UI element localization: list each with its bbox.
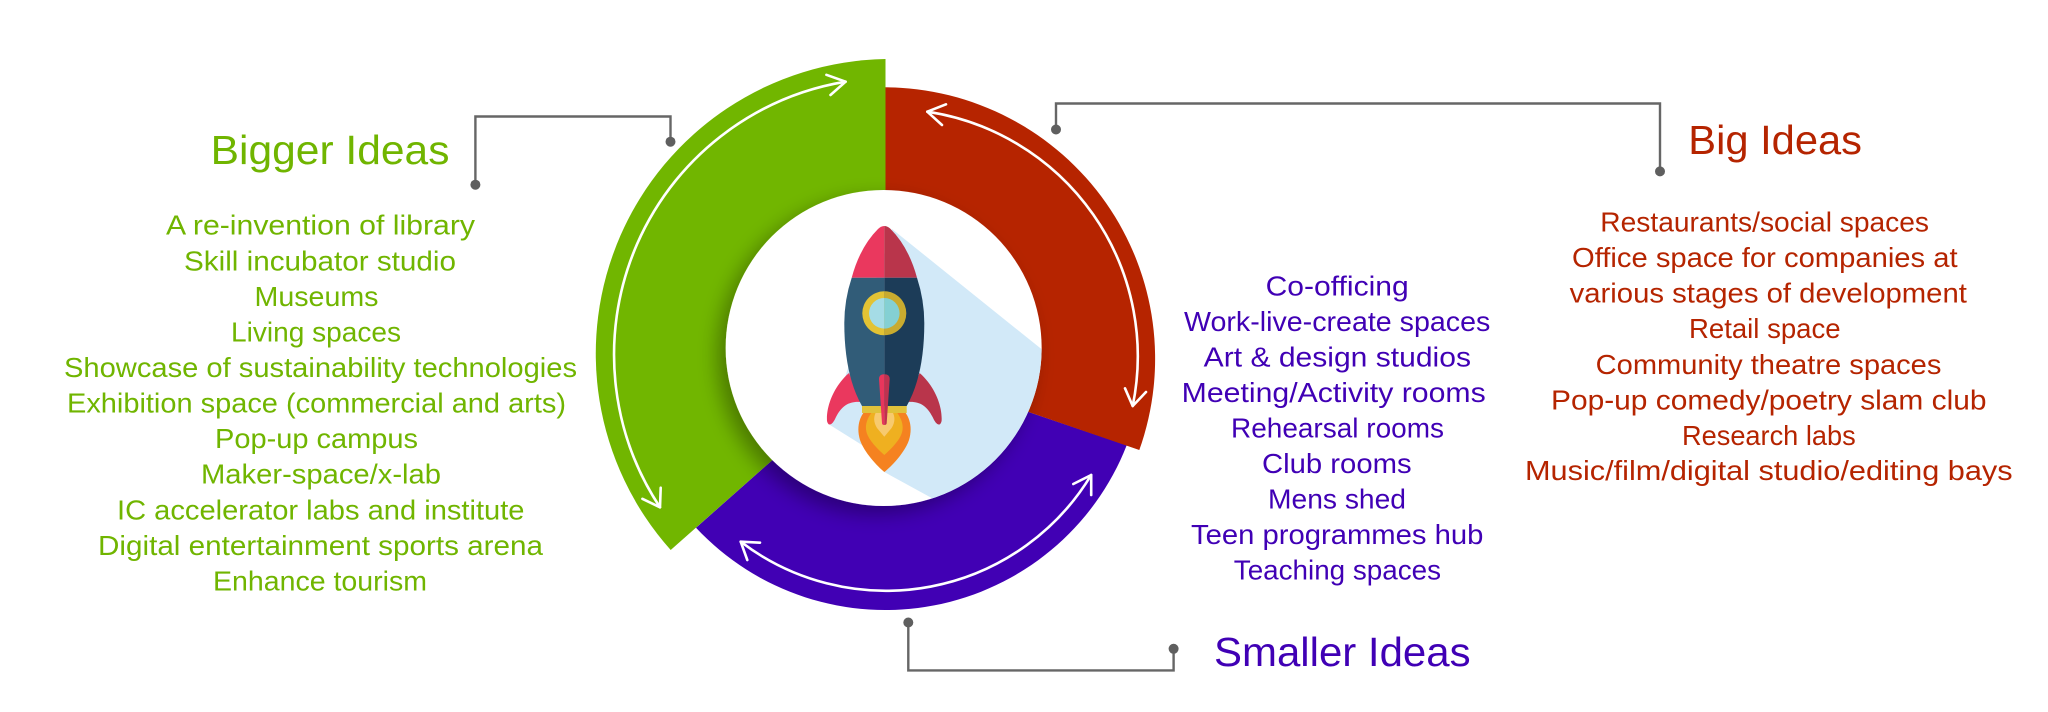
list: big ideas: Retail space bbox=[1689, 313, 1841, 344]
segment: bigger ideas ring (green) bbox=[596, 59, 886, 550]
heading: Big Ideas: Big Ideas bbox=[1688, 117, 1862, 163]
connector: smaller ideas bbox=[903, 618, 1179, 670]
list: bigger ideas: Exhibition space (commercial and arts) bbox=[67, 387, 566, 418]
list: smaller ideas: Meeting/Activity rooms bbox=[1182, 377, 1486, 408]
heading: Smaller Ideas: Smaller Ideas bbox=[1214, 629, 1471, 675]
list: bigger ideas: Enhance tourism bbox=[213, 565, 427, 596]
list: smaller ideas: Teen programmes hub bbox=[1191, 519, 1483, 550]
list: bigger ideas: Living spaces bbox=[231, 316, 401, 347]
connector: big ideas bbox=[1051, 104, 1665, 176]
list: big ideas: Research labs bbox=[1682, 420, 1856, 451]
list: smaller ideas: Co-officing bbox=[1266, 270, 1409, 301]
rocket long shadow bbox=[830, 229, 1042, 498]
list: smaller ideas: Art & design studios bbox=[1204, 341, 1471, 372]
icon: rocket bbox=[827, 226, 942, 472]
connector: bigger ideas bbox=[470, 116, 676, 190]
list: smaller ideas bbox=[1182, 270, 1490, 585]
list: smaller ideas: Mens shed bbox=[1268, 483, 1406, 514]
list: smaller ideas: Teaching spaces bbox=[1234, 554, 1441, 585]
list: big ideas: Office space for companies at bbox=[1572, 242, 1958, 273]
list: big ideas: Community theatre spaces bbox=[1596, 349, 1941, 380]
list: big ideas bbox=[1525, 206, 2013, 486]
list: smaller ideas: Rehearsal rooms bbox=[1231, 412, 1444, 443]
list: bigger ideas: Maker-space/x-lab bbox=[201, 459, 441, 490]
segment: smaller ideas ring (purple) bbox=[696, 348, 1127, 610]
list: bigger ideas: A re-invention of library bbox=[166, 210, 475, 241]
list: bigger ideas bbox=[64, 210, 577, 596]
heading: Bigger Ideas: Bigger Ideas bbox=[211, 127, 450, 173]
arrow: purple double-headed arc bbox=[741, 475, 1091, 591]
list: bigger ideas: Museums bbox=[254, 281, 378, 312]
list: bigger ideas: Skill incubator studio bbox=[184, 246, 456, 276]
list: bigger ideas: IC accelerator labs and institute bbox=[117, 494, 524, 526]
list: smaller ideas: Work-live-create spaces bbox=[1184, 306, 1490, 337]
segment: big ideas ring (red) bbox=[884, 87, 1155, 450]
arrow: red double-headed arc bbox=[927, 104, 1146, 406]
list: bigger ideas: Digital entertainment sports arena bbox=[98, 530, 543, 561]
list: big ideas: Restaurants/social spaces bbox=[1600, 206, 1929, 237]
list: big ideas: various stages of development bbox=[1570, 277, 1967, 308]
list: bigger ideas: Pop-up campus bbox=[215, 423, 418, 454]
centre white circle bbox=[726, 190, 1042, 506]
list: big ideas: Pop-up comedy/poetry slam club bbox=[1551, 384, 1986, 415]
list: smaller ideas: Club rooms bbox=[1262, 448, 1412, 479]
list: bigger ideas: Showcase of sustainability technologies bbox=[64, 352, 577, 383]
arrow: green double-headed arc bbox=[614, 75, 846, 507]
list: big ideas: Music/film/digital studio/editing bays bbox=[1525, 455, 2013, 486]
